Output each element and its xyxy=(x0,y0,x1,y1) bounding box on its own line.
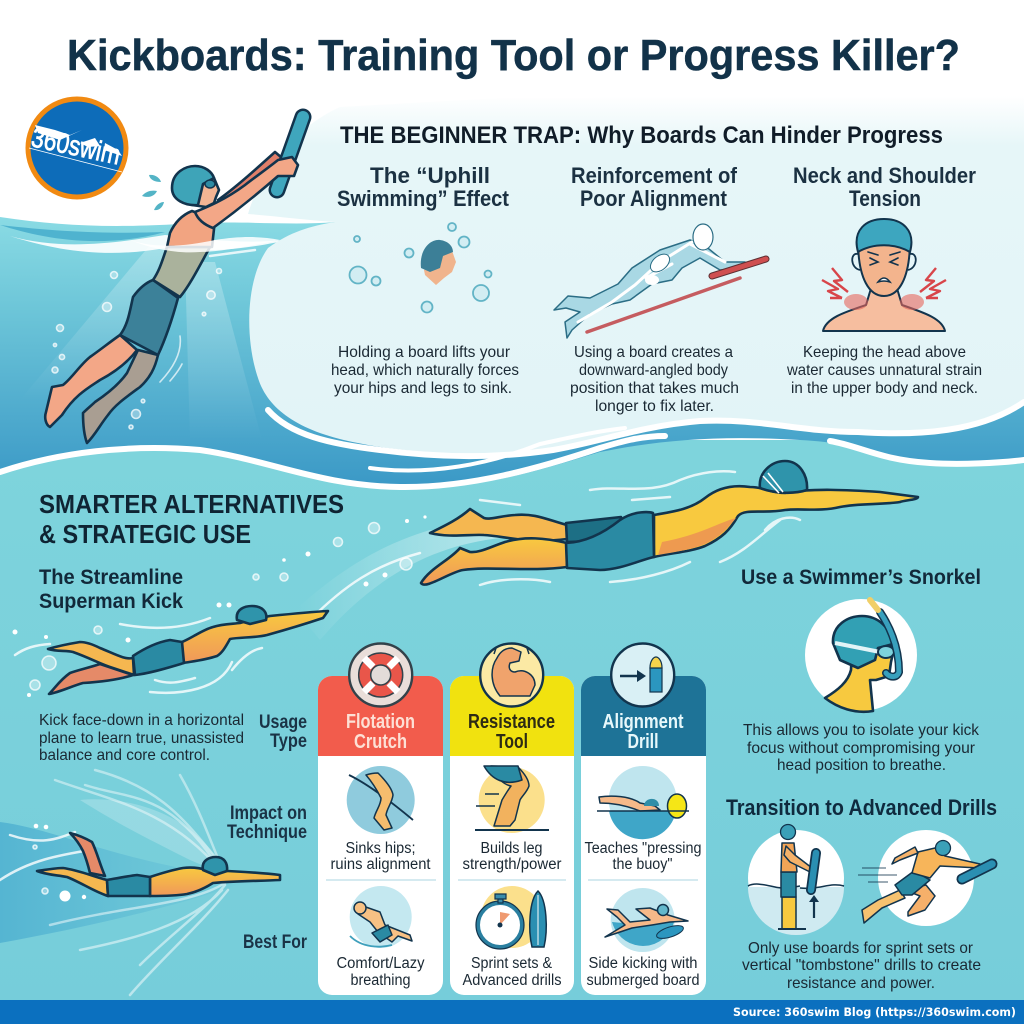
logo: 360swim xyxy=(28,99,126,197)
header text: Drill xyxy=(628,731,658,753)
header text: Crutch xyxy=(354,731,407,753)
description: Keeping the head above xyxy=(803,344,966,361)
description: focus without compromising your xyxy=(747,740,976,757)
text: best for xyxy=(462,955,562,989)
sub-section: transition to advanced drills xyxy=(726,795,997,992)
water line over body xyxy=(130,237,280,252)
icon: skeleton swimmer at downward angle xyxy=(554,224,766,338)
heading: Tension xyxy=(849,186,921,211)
icon: arrow and buoy xyxy=(611,644,674,706)
torso above water xyxy=(167,211,215,247)
rear shorts xyxy=(566,517,621,542)
description xyxy=(743,722,980,774)
description: longer to fix later. xyxy=(595,398,714,415)
description: Kick face-down in a horizontal xyxy=(39,712,244,729)
description: in the upper body and neck. xyxy=(791,380,978,397)
header text: Flotation xyxy=(346,711,415,733)
heading: Use a Swimmer’s Snorkel xyxy=(741,566,981,589)
column: uphill swimming effect xyxy=(331,163,519,397)
icon: leg drive xyxy=(475,766,549,833)
column: neck and shoulder tension xyxy=(786,163,982,397)
description xyxy=(786,344,982,397)
heading: Poor Alignment xyxy=(580,186,727,211)
face xyxy=(192,172,219,207)
panel: the beginner trap xyxy=(331,122,982,415)
card body xyxy=(318,676,443,995)
bubbles xyxy=(52,268,222,429)
heading xyxy=(793,163,976,211)
back leg xyxy=(83,350,158,443)
sub-section: swimmer's snorkel xyxy=(741,566,981,774)
rear arm xyxy=(218,152,282,208)
text: best for: Side kicking with xyxy=(588,955,698,972)
description: resistance and power. xyxy=(787,975,935,992)
lower leg xyxy=(421,538,567,585)
description: plane to learn true, unassisted xyxy=(39,730,244,747)
text: impact: the buoy" xyxy=(612,856,672,873)
text: best for: submerged board xyxy=(586,972,700,989)
icon: stopwatch and board xyxy=(476,886,546,949)
illustration: streamline swimmer xyxy=(12,602,328,697)
panel heading: THE BEGINNER TRAP: Why Boards Can Hinder Progress xyxy=(340,122,943,149)
column: flotation crutch xyxy=(318,644,443,995)
heading: Reinforcement of xyxy=(571,163,737,188)
swim cap xyxy=(172,166,214,205)
heading xyxy=(337,163,509,211)
card header xyxy=(450,676,574,756)
heading: The Streamline xyxy=(39,566,183,589)
text: best for: Sprint sets & xyxy=(471,955,553,972)
icon: flexed arm xyxy=(480,644,543,706)
text: best for xyxy=(586,955,700,989)
description: position that takes much xyxy=(570,380,739,397)
lines in water xyxy=(480,471,800,585)
card body xyxy=(450,676,574,995)
row labels: Impact on xyxy=(230,803,307,824)
water trail behind big swimmer xyxy=(253,515,500,640)
background: upper water wave xyxy=(0,217,1024,488)
heading xyxy=(571,163,737,211)
footer bar with source: Source: 360swim Blog (https://360swim.com) xyxy=(733,1005,1016,1019)
description: balance and core control. xyxy=(39,747,210,764)
description: head, which naturally forces xyxy=(331,362,519,379)
icon: swimmer with snorkel xyxy=(805,599,917,712)
title: Kickboards: Training Tool or Progress Killer? xyxy=(67,31,960,80)
description: Only use boards for sprint sets or xyxy=(748,940,974,957)
description xyxy=(331,344,519,397)
icon: lazy floating xyxy=(350,886,412,948)
description: your hips and legs to sink. xyxy=(334,380,512,397)
illustration: swimmer lifting upward with board xyxy=(45,117,303,443)
header text: Alignment xyxy=(602,711,684,733)
text: impact: Teaches "pressing xyxy=(584,840,702,857)
water droplets xyxy=(142,175,164,210)
board xyxy=(277,117,303,190)
background: lower water xyxy=(0,440,1024,1010)
description xyxy=(39,712,244,764)
row labels: Type xyxy=(270,731,307,752)
description xyxy=(742,940,981,992)
footer bar with source xyxy=(0,1000,1024,1024)
illustration: big swimmer streamlined xyxy=(421,461,918,585)
shorts xyxy=(566,512,654,570)
goggles xyxy=(205,180,215,188)
text: impact xyxy=(584,840,702,873)
column: alignment drill xyxy=(581,644,706,995)
illustration: lower-left swimmer with flow lines xyxy=(0,770,280,995)
text: impact: Sinks hips; xyxy=(346,840,416,857)
torso and arm xyxy=(654,486,918,557)
heading: The “Uphill xyxy=(370,163,490,188)
description: downward-angled body xyxy=(579,362,728,379)
icon: sprint with board xyxy=(858,830,992,926)
heading xyxy=(39,566,183,613)
row labels: Technique xyxy=(227,822,307,843)
card header xyxy=(318,676,443,756)
text: best for xyxy=(336,955,425,989)
panel: beginner trap background xyxy=(248,96,1024,454)
text: best for: breathing xyxy=(350,972,410,989)
icon: life ring xyxy=(349,644,412,706)
card body xyxy=(581,676,706,995)
row labels: Best For xyxy=(243,932,307,953)
torso in water xyxy=(153,247,210,297)
description: head position to breathe. xyxy=(777,757,946,774)
icon: head with bubbles xyxy=(350,223,492,312)
swim cap xyxy=(760,461,807,493)
light rays xyxy=(20,245,262,440)
description: This allows you to isolate your kick xyxy=(743,722,980,739)
row labels: Usage xyxy=(259,712,307,733)
icon: side kicking xyxy=(605,888,688,952)
text: impact: strength/power xyxy=(462,856,562,873)
water surface highlights xyxy=(0,225,300,256)
heading: Neck and Shoulder xyxy=(793,163,976,188)
text: best for: Comfort/Lazy xyxy=(336,955,425,972)
text: best for: Advanced drills xyxy=(462,972,562,989)
icon: strained neck xyxy=(822,219,946,331)
row labels xyxy=(227,712,307,953)
description: vertical "tombstone" drills to create xyxy=(742,957,981,974)
description: Using a board creates a xyxy=(574,344,733,361)
torso shading xyxy=(658,518,736,555)
upper leg xyxy=(430,509,567,541)
logo: 360swim: 360swim xyxy=(29,122,123,171)
white wave stripes xyxy=(0,402,1024,487)
comparison table xyxy=(227,644,706,995)
header text: Tool xyxy=(496,731,528,753)
front arm xyxy=(195,157,298,228)
description: water causes unnatural strain xyxy=(786,362,982,379)
text: impact: Builds leg xyxy=(480,840,542,857)
text: impact: ruins alignment xyxy=(330,856,431,873)
column: resistance tool xyxy=(450,644,574,995)
header text: Resistance xyxy=(468,711,555,733)
text: impact xyxy=(462,840,562,873)
card header xyxy=(581,676,706,756)
front leg xyxy=(45,335,137,427)
text: impact xyxy=(330,840,431,873)
icon: vertical tombstone drill xyxy=(748,824,844,935)
icon: pressing the buoy xyxy=(597,766,689,839)
header text xyxy=(346,711,415,753)
description xyxy=(570,344,739,415)
header text xyxy=(602,711,684,753)
shorts xyxy=(120,280,178,355)
heading: Superman Kick xyxy=(39,590,183,613)
section heading: smarter alternatives xyxy=(39,489,344,549)
heading: Swimming” Effect xyxy=(337,186,509,211)
sub-section: streamline superman kick xyxy=(12,566,328,764)
header text xyxy=(468,711,555,753)
section heading: smarter alternatives: & STRATEGIC USE xyxy=(39,519,251,549)
section heading: smarter alternatives: SMARTER ALTERNATIVES xyxy=(39,489,344,519)
column: reinforcement of poor alignment xyxy=(554,163,766,415)
icon: sinking leg xyxy=(347,766,415,834)
description: Holding a board lifts your xyxy=(338,344,511,361)
